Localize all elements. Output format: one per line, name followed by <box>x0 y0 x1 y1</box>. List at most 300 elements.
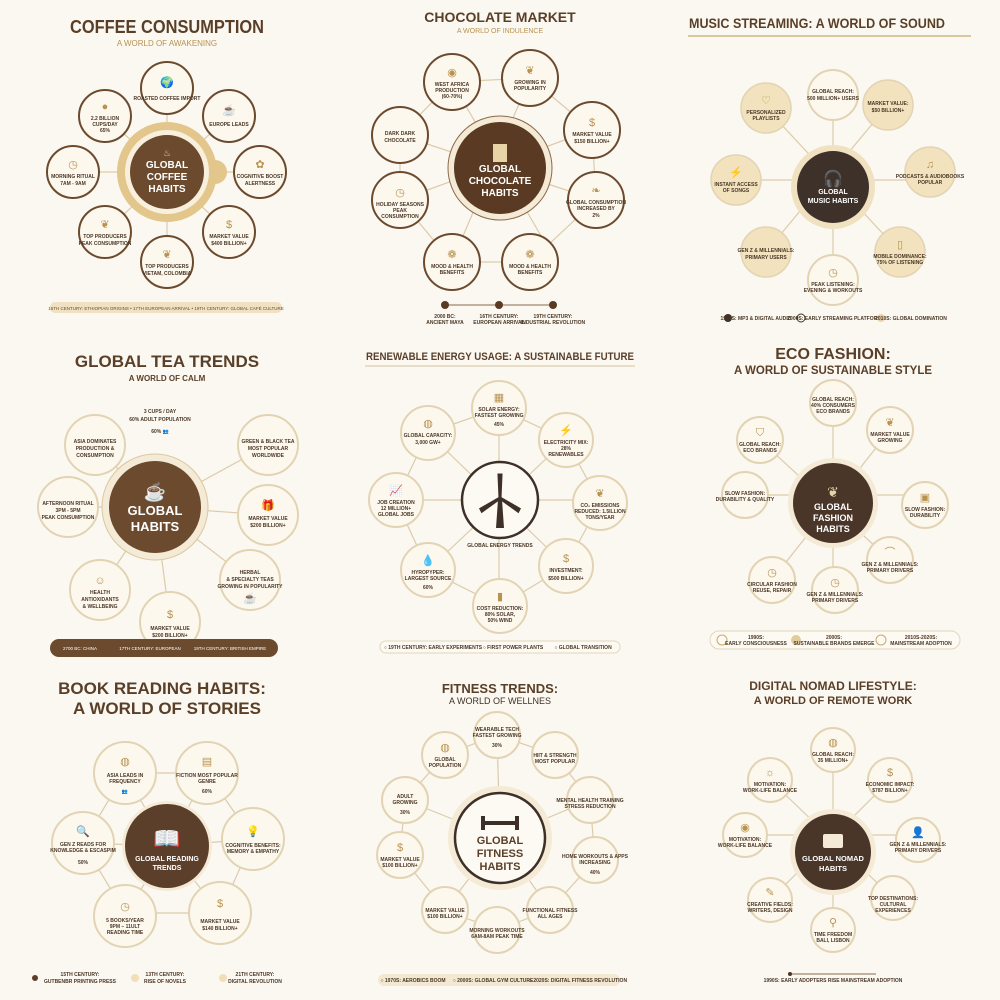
node: cognitive boost <box>234 146 286 198</box>
node: global consumption: ❧ <box>591 185 601 197</box>
timeline: tea: 19TH CENTURY: BRITISH EMPIRE <box>194 646 266 651</box>
subtitle: eco fashion: A WORLD OF SUSTAINABLE STYLE <box>734 365 932 377</box>
node: investment: $ <box>563 553 569 565</box>
timeline: coffee <box>48 302 284 313</box>
node: global capacity <box>401 406 455 460</box>
node: gen z <box>890 818 947 862</box>
panel: renewable energy <box>365 351 635 653</box>
node: global reach left: ECO BRANDS <box>743 448 777 454</box>
title: energy: RENEWABLE ENERGY USAGE: A SUSTAINABLE FUTURE <box>366 351 634 363</box>
node: market value 2: MARKET VALUE <box>380 857 420 863</box>
center: global fashion habits: FASHION <box>813 513 853 523</box>
node: slow fashion right <box>902 482 948 528</box>
node: market value <box>422 887 468 933</box>
node: roasted coffee import <box>134 62 200 114</box>
node: creative fields: ✎ <box>765 887 775 899</box>
node: job creation <box>369 473 423 527</box>
node: hydropower: 💧 <box>421 554 435 567</box>
node: market value right <box>238 485 298 545</box>
node: slow fashion left: SLOW FASHION: <box>725 491 765 497</box>
timeline: books: GUTBENBR PRINTING PRESS <box>44 979 117 985</box>
node: mood left: ❁ <box>447 249 457 261</box>
node: cognitive: MEMORY & EMPATHY <box>227 849 280 855</box>
panel: eco fashion <box>710 346 960 649</box>
node: asia leads: ASIA LEADS IN <box>107 773 144 779</box>
center: global fashion habits: GLOBAL <box>814 502 852 512</box>
node: market value: $ <box>217 898 223 910</box>
node: roasted coffee import: ROASTED COFFEE IMPORT <box>134 96 200 102</box>
center: global chocolate habits: HABITS <box>481 188 519 199</box>
node: economic impact: $ <box>887 767 893 779</box>
node: mobile: 75% OF LISTENING <box>877 260 923 266</box>
node: 2.2 billion cups: 2.2 BILLION <box>91 116 120 122</box>
node: cost reduction: 50% WIND <box>488 618 513 624</box>
node: market value: $ <box>589 117 595 129</box>
title: music: MUSIC STREAMING: A WORLD OF SOUND <box>689 15 945 31</box>
node: motivation left: ◉ <box>740 822 750 834</box>
node: investment: INVESTMENT: <box>549 568 583 574</box>
node: market value bottom: $ <box>167 609 173 621</box>
node: health: ☺ <box>94 575 106 587</box>
node: motivation top <box>743 758 798 802</box>
node: motivation top: WORK-LIFE BALANCE <box>743 788 798 794</box>
node: asia leads: FREQUENCY <box>109 779 141 785</box>
node: solar <box>472 381 526 435</box>
node: motivation top: ☼ <box>765 767 775 779</box>
node: global capacity: ◍ <box>423 418 433 430</box>
node: morning <box>469 907 525 953</box>
node: co2: ❦ <box>595 488 605 500</box>
node: global reach: ◍ <box>828 737 838 749</box>
node: podcasts <box>896 147 965 197</box>
node: playlists: PERSONALIZED <box>746 110 786 116</box>
node: motivation left: MOTIVATION: <box>729 837 761 843</box>
node: economic impact <box>866 758 915 802</box>
timeline: chocolate: 16TH CENTURY: <box>480 314 519 320</box>
node: mood left: MOOD & HEALTH <box>431 264 473 270</box>
timeline: music <box>720 314 947 322</box>
node: europe leads: ☕ <box>222 103 236 117</box>
subtitle: coffee: A WORLD OF AWAKENING <box>117 39 217 48</box>
node: adult growing: ADULT <box>397 794 413 800</box>
timeline: coffee: 15TH CENTURY: ETHIOPIAN ORIGINS • 17TH EUROPEAN ARRIVAL • 19TH CENTURY: GLOBAL CAFÉ CULTURE <box>48 305 284 311</box>
timeline: eco fashion: MAINSTREAM ADOPTION <box>890 641 952 647</box>
node: home workouts <box>562 837 629 883</box>
node: slow fashion right: ▣ <box>920 492 930 504</box>
subtitle: tea: A WORLD OF CALM <box>129 374 206 383</box>
node: morning ritual: 7AM - 9AM <box>60 181 86 187</box>
node: europe leads <box>203 90 255 142</box>
node: asia: PRODUCTION & <box>76 446 115 452</box>
title: tea: GLOBAL TEA TRENDS <box>75 352 259 371</box>
node: economic impact: $787 BILLION+ <box>872 788 908 794</box>
center: global coffee habits: HABITS <box>148 184 186 195</box>
node: market value: MARKET VALUE <box>870 432 910 438</box>
node: market value right: MARKET VALUE <box>248 516 288 522</box>
center: global habits: ☕ <box>144 481 166 502</box>
node: afternoon: 3PM - 5PM <box>55 508 81 514</box>
node: growing: GROWING IN <box>514 80 546 86</box>
node: herbal <box>218 550 283 610</box>
node: circular fashion: REUSE, REPAIR <box>753 588 792 594</box>
node: green black <box>238 415 298 475</box>
center: global music habits: 🎧 <box>823 169 843 188</box>
center: global chocolate habits <box>448 116 552 220</box>
node: top destinations <box>868 876 918 920</box>
center: global fitness habits: GLOBAL <box>477 835 523 847</box>
node: afternoon <box>38 477 98 537</box>
node: growing: POPULARITY <box>514 86 547 92</box>
panel: music <box>688 15 971 322</box>
node: creative fields: WRITERS, DESIGN <box>747 908 793 914</box>
node: time freedom: ⚲ <box>829 917 837 929</box>
node: top producers 2 <box>79 206 132 258</box>
center: global coffee habits: GLOBAL <box>146 160 188 171</box>
timeline: chocolate: ANCIENT MAYA <box>426 320 464 326</box>
node: west africa: ◉ <box>447 67 457 79</box>
center: global chocolate habits: GLOBAL <box>479 164 521 175</box>
node: job creation: 📈 <box>389 484 403 497</box>
stat: 3 cups: 3 CUPS / DAY <box>144 409 177 415</box>
node: global reach left: ⛉ <box>756 427 765 439</box>
node: investment <box>539 539 593 593</box>
node: asia <box>65 415 125 475</box>
node: morning ritual: MORNING RITUAL <box>51 174 95 180</box>
node: market value: $400 BILLION+ <box>211 241 247 247</box>
timeline: energy: ○ 19TH CENTURY: EARLY EXPERIMENTS <box>384 645 483 651</box>
node: hydropower: 60% <box>423 585 434 591</box>
node: global reach left <box>737 417 783 463</box>
node: market value <box>867 407 913 453</box>
node: health: ANTIOXIDANTS <box>81 597 119 603</box>
node: mental health: MENTAL HEALTH TRAINING <box>556 798 624 804</box>
center: wind turbine: GLOBAL ENERGY TRENDS <box>467 543 533 549</box>
node: growing <box>502 50 558 106</box>
node: gen z bottom: PRIMARY DRIVERS <box>812 598 859 604</box>
center: global nomad habits: GLOBAL NOMAD <box>802 854 865 863</box>
node: fiction <box>176 742 238 804</box>
node: market value: GROWING <box>878 438 903 444</box>
node: green black: WORLDWIDE <box>252 453 285 459</box>
node: wearable <box>473 712 522 758</box>
node: gen z <box>50 812 116 874</box>
timeline: nomad <box>764 972 903 984</box>
node: top producers: VIETAM, COLOMBIA <box>143 271 192 277</box>
title: fitness: FITNESS TRENDS: <box>442 681 558 696</box>
center: global habits: GLOBAL <box>128 503 182 518</box>
node: global reach: GLOBAL REACH: <box>812 89 854 95</box>
node: asia: ASIA DOMINATES <box>74 439 117 445</box>
node: co2: CO₂ EMISSIONS <box>581 503 620 509</box>
panel: chocolate <box>372 9 626 326</box>
node: west africa: PRODUCTION <box>435 88 469 94</box>
timeline: chocolate: 2000 BC: <box>434 314 456 320</box>
node: cost reduction: COST REDUCTION: <box>477 606 524 612</box>
node: global consumption <box>566 172 626 228</box>
node: gen z bottom: GEN Z & MILLENNIALS: <box>807 592 864 598</box>
node: holiday: HOLIDAY SEASONS <box>376 202 425 208</box>
node: investment: $500 BILLION+ <box>548 576 584 582</box>
node: mood right: ❁ <box>525 249 535 261</box>
node: top producers <box>141 236 193 288</box>
node: global participation: GLOBAL <box>434 757 456 763</box>
node: mood left <box>424 234 480 290</box>
node: slow fashion left: DURABILITY & QUALITY <box>716 497 775 503</box>
node: wearable: WEARABLE TECH <box>475 727 519 733</box>
node: market value <box>189 882 251 944</box>
node: circular fashion: ◷ <box>767 567 777 579</box>
node: instant access: INSTANT ACCESS <box>714 182 758 188</box>
timeline: books: DIGITAL REVOLUTION <box>228 979 282 985</box>
node: market value: $ <box>226 219 232 231</box>
panel: book reading <box>32 679 284 985</box>
node: cognitive: 💡 <box>246 825 260 838</box>
node: hiit: HIIT & STRENGTH <box>533 753 577 759</box>
node: cost reduction: 80% SOLAR, <box>485 612 516 618</box>
node: gen z bottom: ◷ <box>830 577 840 589</box>
node: 5 books: READING TIME <box>107 930 144 936</box>
center: global coffee habits: COFFEE <box>147 172 188 183</box>
node: 2.2 billion cups: CUPS/DAY <box>92 122 118 128</box>
node: holiday: CONSUMPTION <box>381 214 419 220</box>
title: book reading: BOOK READING HABITS: <box>58 679 266 698</box>
node: cognitive boost: ALERTNESS <box>245 181 276 187</box>
node: global participation: ◍ <box>440 742 450 754</box>
node: cognitive: COGNITIVE BENEFITS: <box>225 843 281 849</box>
node: morning ritual: ◷ <box>68 159 78 171</box>
node: afternoon: PEAK CONSUMPTION <box>42 515 95 521</box>
node: gen z: 🔍 <box>76 824 90 838</box>
node: market value bottom: $200 BILLION+ <box>152 633 188 639</box>
timeline: books: RISE OF NOVELS <box>144 979 187 985</box>
node: top destinations: EXPERIENCES <box>875 908 911 914</box>
node: gen z: KNOWLEDGE & ESCASPIM <box>50 848 116 854</box>
node: herbal: & SPECIALTY TEAS <box>226 577 274 583</box>
node: wearable: FASTEST GROWING <box>473 733 522 739</box>
center: global reading trends: GLOBAL READING <box>135 856 199 863</box>
timeline: eco fashion: 1990S: <box>748 635 764 641</box>
node: hydropower: LARGEST SOURCE <box>405 576 452 582</box>
node: top producers 2: TOP PRODUCERS <box>83 234 127 240</box>
node: electricity mix: 28% <box>561 446 572 452</box>
node: time freedom <box>811 908 855 952</box>
node: playlists <box>741 83 791 133</box>
node: circular fashion: CIRCULAR FASHION <box>747 582 797 588</box>
title: eco fashion: ECO FASHION: <box>775 346 891 363</box>
node: circular fashion <box>747 557 797 603</box>
timeline: nomad: 1990S: EARLY ADOPTERS RISE MAINSTREAM ADOPTION <box>764 978 903 984</box>
node: global reach: GLOBAL REACH: <box>812 752 854 758</box>
node: co2: TONS/YEAR <box>585 515 615 521</box>
node: market value: MARKET VALUE <box>425 908 465 914</box>
node: top destinations: CULTURAL <box>880 902 906 908</box>
node: global reach: 500 MILLION+ USERS <box>807 96 860 102</box>
node: global participation: POPULATION <box>429 763 462 769</box>
subtitle: fitness: A WORLD OF WELLNES <box>449 696 551 706</box>
timeline: chocolate: EUROPEAN ARRIVAL <box>473 320 525 326</box>
node: podcasts: ♫ <box>926 159 934 171</box>
node: electricity mix <box>539 413 593 467</box>
node: global consumption: INCREASED BY <box>577 206 616 212</box>
node: home workouts: INCREASING <box>579 860 611 866</box>
center: global nomad habits: HABITS <box>819 864 847 873</box>
center: global fashion habits: HABITS <box>816 524 850 534</box>
node: functional <box>523 887 578 933</box>
timeline: books: 15TH CENTURY: <box>61 972 100 978</box>
node: global capacity: GLOBAL CAPACITY: <box>404 433 453 439</box>
node: dark chocolates: CHOCOLATE <box>384 138 416 144</box>
node: fiction: GENRE <box>198 779 217 785</box>
node: market value 2: $100 BILLION+ <box>382 863 418 869</box>
center: global reading trends <box>122 801 212 891</box>
timeline: energy <box>380 641 620 653</box>
node: solar: 45% <box>494 422 505 428</box>
node: asia leads <box>94 742 156 804</box>
node: mobile: MOBILE DOMINANCE: <box>873 254 927 260</box>
node: gen z: GEN Z & MILLENNIALS: <box>862 562 919 568</box>
node: mood right <box>502 234 558 290</box>
node: cost reduction <box>473 579 527 633</box>
node: growing: ❦ <box>525 65 535 77</box>
node: gen z: 50% <box>78 860 89 866</box>
node: gen z: 👤 <box>911 826 925 839</box>
node: morning ritual <box>47 146 99 198</box>
center: global fashion habits <box>788 458 878 548</box>
node: fiction: 60% <box>202 789 213 795</box>
node: market value: $150 BILLION+ <box>574 139 610 145</box>
node: market value bottom <box>140 592 200 652</box>
node: time freedom: BALI, LISBON <box>816 938 850 944</box>
node: top producers: ❦ <box>162 249 172 261</box>
timeline: fitness: ○ 2000S: GLOBAL GYM CULTURE <box>453 978 534 984</box>
node: 5 books: 5 BOOKS/YEAR <box>106 918 144 924</box>
center: global fashion habits: ❦ <box>827 484 839 500</box>
node: solar: SOLAR ENERGY: <box>478 407 520 413</box>
stat: 3 cups: 60% ADULT POPULATION <box>129 417 191 423</box>
node: market value: MARKET VALUE <box>572 132 612 138</box>
title: coffee: COFFEE CONSUMPTION <box>70 17 264 37</box>
node: job creation: JOB CREATION <box>377 500 415 506</box>
timeline: energy: ○ FIRST POWER PLANTS <box>483 645 544 651</box>
node: global consumption: 2% <box>592 213 600 219</box>
node: electricity mix: ⚡ <box>559 424 573 437</box>
node: global reach: 35 MILLION+ <box>818 758 848 764</box>
node: job creation: GLOBAL JOBS <box>378 512 415 518</box>
node: motivation left <box>718 813 773 857</box>
node: market value: MARKET VALUE: <box>867 101 909 107</box>
node: market value right: $200 BILLION+ <box>250 523 286 529</box>
node: cost reduction: ▮ <box>497 591 503 603</box>
center: global chocolate habits: CHOCOLATE <box>469 176 532 187</box>
timeline: eco fashion: EARLY CONSCIOUSNESS <box>725 641 788 647</box>
panel: coffee <box>47 17 286 313</box>
node: gen z: PRIMARY USERS <box>745 255 787 261</box>
center: global coffee habits: ♨ <box>163 148 171 158</box>
node: top producers: TOP PRODUCERS <box>145 264 189 270</box>
timeline: eco fashion: 2010S-2020S: <box>905 635 937 641</box>
panel: fitness <box>377 681 629 986</box>
node: dark chocolates <box>372 107 428 163</box>
node: adult growing: GROWING <box>392 800 418 806</box>
panel: digital nomad <box>718 679 947 984</box>
node: fiction: ▤ <box>202 756 212 768</box>
subtitle: digital nomad: A WORLD OF REMOTE WORK <box>754 695 912 707</box>
center: global music habits: GLOBAL <box>818 189 848 196</box>
node: gen z: GEN Z & MILLENNIALS: <box>890 842 947 848</box>
node: wearable: 30% <box>492 743 503 749</box>
node: health: HEALTH <box>90 590 110 596</box>
node: mental health <box>556 777 624 823</box>
timeline: tea: 2700 BC: CHINA <box>63 646 97 651</box>
node: global reach top: 40% CONSUMERS <box>811 403 856 409</box>
timeline: music: 2010S: GLOBAL DOMINATION <box>875 316 947 322</box>
panel: book reading: A WORLD OF STORIES <box>73 699 261 718</box>
node: 2.2 billion cups <box>79 90 131 142</box>
timeline: books: 13TH CENTURY: <box>146 972 185 978</box>
node: holiday <box>372 172 428 228</box>
node: asia: CONSUMPTION <box>76 453 114 459</box>
timeline: eco fashion: SUSTAINABLE BRANDS EMERGE <box>793 641 875 647</box>
timeline: music: 2000S: EARLY STREAMING PLATFORMS <box>787 316 885 322</box>
node: adult growing <box>382 777 428 823</box>
node: global reach top: GLOBAL REACH: <box>812 397 854 403</box>
node: gen z: GEN Z & MILLENNIALS: <box>738 248 795 254</box>
node: 2.2 billion cups: 65% <box>100 128 111 134</box>
node: top producers 2: PEAK CONSUMPTION <box>79 241 132 247</box>
node: mobile <box>873 227 927 277</box>
center: global fitness habits: HABITS <box>480 861 520 873</box>
node: global capacity: 3,000 GW+ <box>415 440 441 446</box>
node: peak listening: EVENING & WORKOUTS <box>804 288 863 294</box>
node: global reach <box>807 70 860 120</box>
timeline: music: 1990S: MP3 & DIGITAL AUDIO <box>720 316 792 322</box>
node: holiday: ◷ <box>395 187 405 199</box>
center: global fitness habits <box>448 786 552 890</box>
node: market value: ❦ <box>885 417 895 429</box>
timeline: chocolate: 19TH CENTURY: <box>534 314 573 320</box>
node: global consumption: GLOBAL CONSUMPTION <box>566 200 626 206</box>
node: asia leads: 👥 <box>122 789 128 795</box>
node: mood right: MOOD & HEALTH <box>509 264 551 270</box>
node: podcasts: PODCASTS & AUDIOBOOKS <box>896 174 965 180</box>
node: west africa <box>424 54 480 110</box>
node: 5 books: ◷ <box>120 901 130 913</box>
node: afternoon: AFTERNOON RITUAL <box>42 501 94 507</box>
center: global reading trends: 📖 <box>153 826 181 851</box>
center: global nomad habits <box>790 809 876 895</box>
node: time freedom: TIME FREEDOM <box>814 932 852 938</box>
node: market value 2: $ <box>397 842 403 854</box>
node: top destinations: TOP DESTINATIONS: <box>868 896 918 902</box>
center: global habits: HABITS <box>131 519 180 534</box>
node: functional: ALL AGES <box>537 914 563 920</box>
node: gen z: PRIMARY DRIVERS <box>867 568 914 574</box>
node: asia leads: ◍ <box>120 756 130 768</box>
node: west africa: WEST AFRICA <box>435 82 470 88</box>
node: herbal: GROWING IN POPULARITY <box>218 584 283 590</box>
node: solar: ▦ <box>494 392 504 404</box>
node: peak listening: ◷ <box>828 267 838 279</box>
node: slow fashion right: DURABILITY <box>910 513 941 519</box>
node: creative fields <box>747 878 793 922</box>
center: global music habits: MUSIC HABITS <box>808 198 859 205</box>
node: health: & WELLBEING <box>82 604 118 610</box>
node: global participation <box>422 732 468 778</box>
timeline: fitness: ○ 2020S: DIGITAL FITNESS REVOLUTION <box>529 978 627 984</box>
timeline: chocolate: INDUSTRIAL REVOLUTION <box>521 320 586 326</box>
title: chocolate: CHOCOLATE MARKET <box>424 9 576 25</box>
node: morning: MORNING WORKOUTS <box>469 928 525 934</box>
